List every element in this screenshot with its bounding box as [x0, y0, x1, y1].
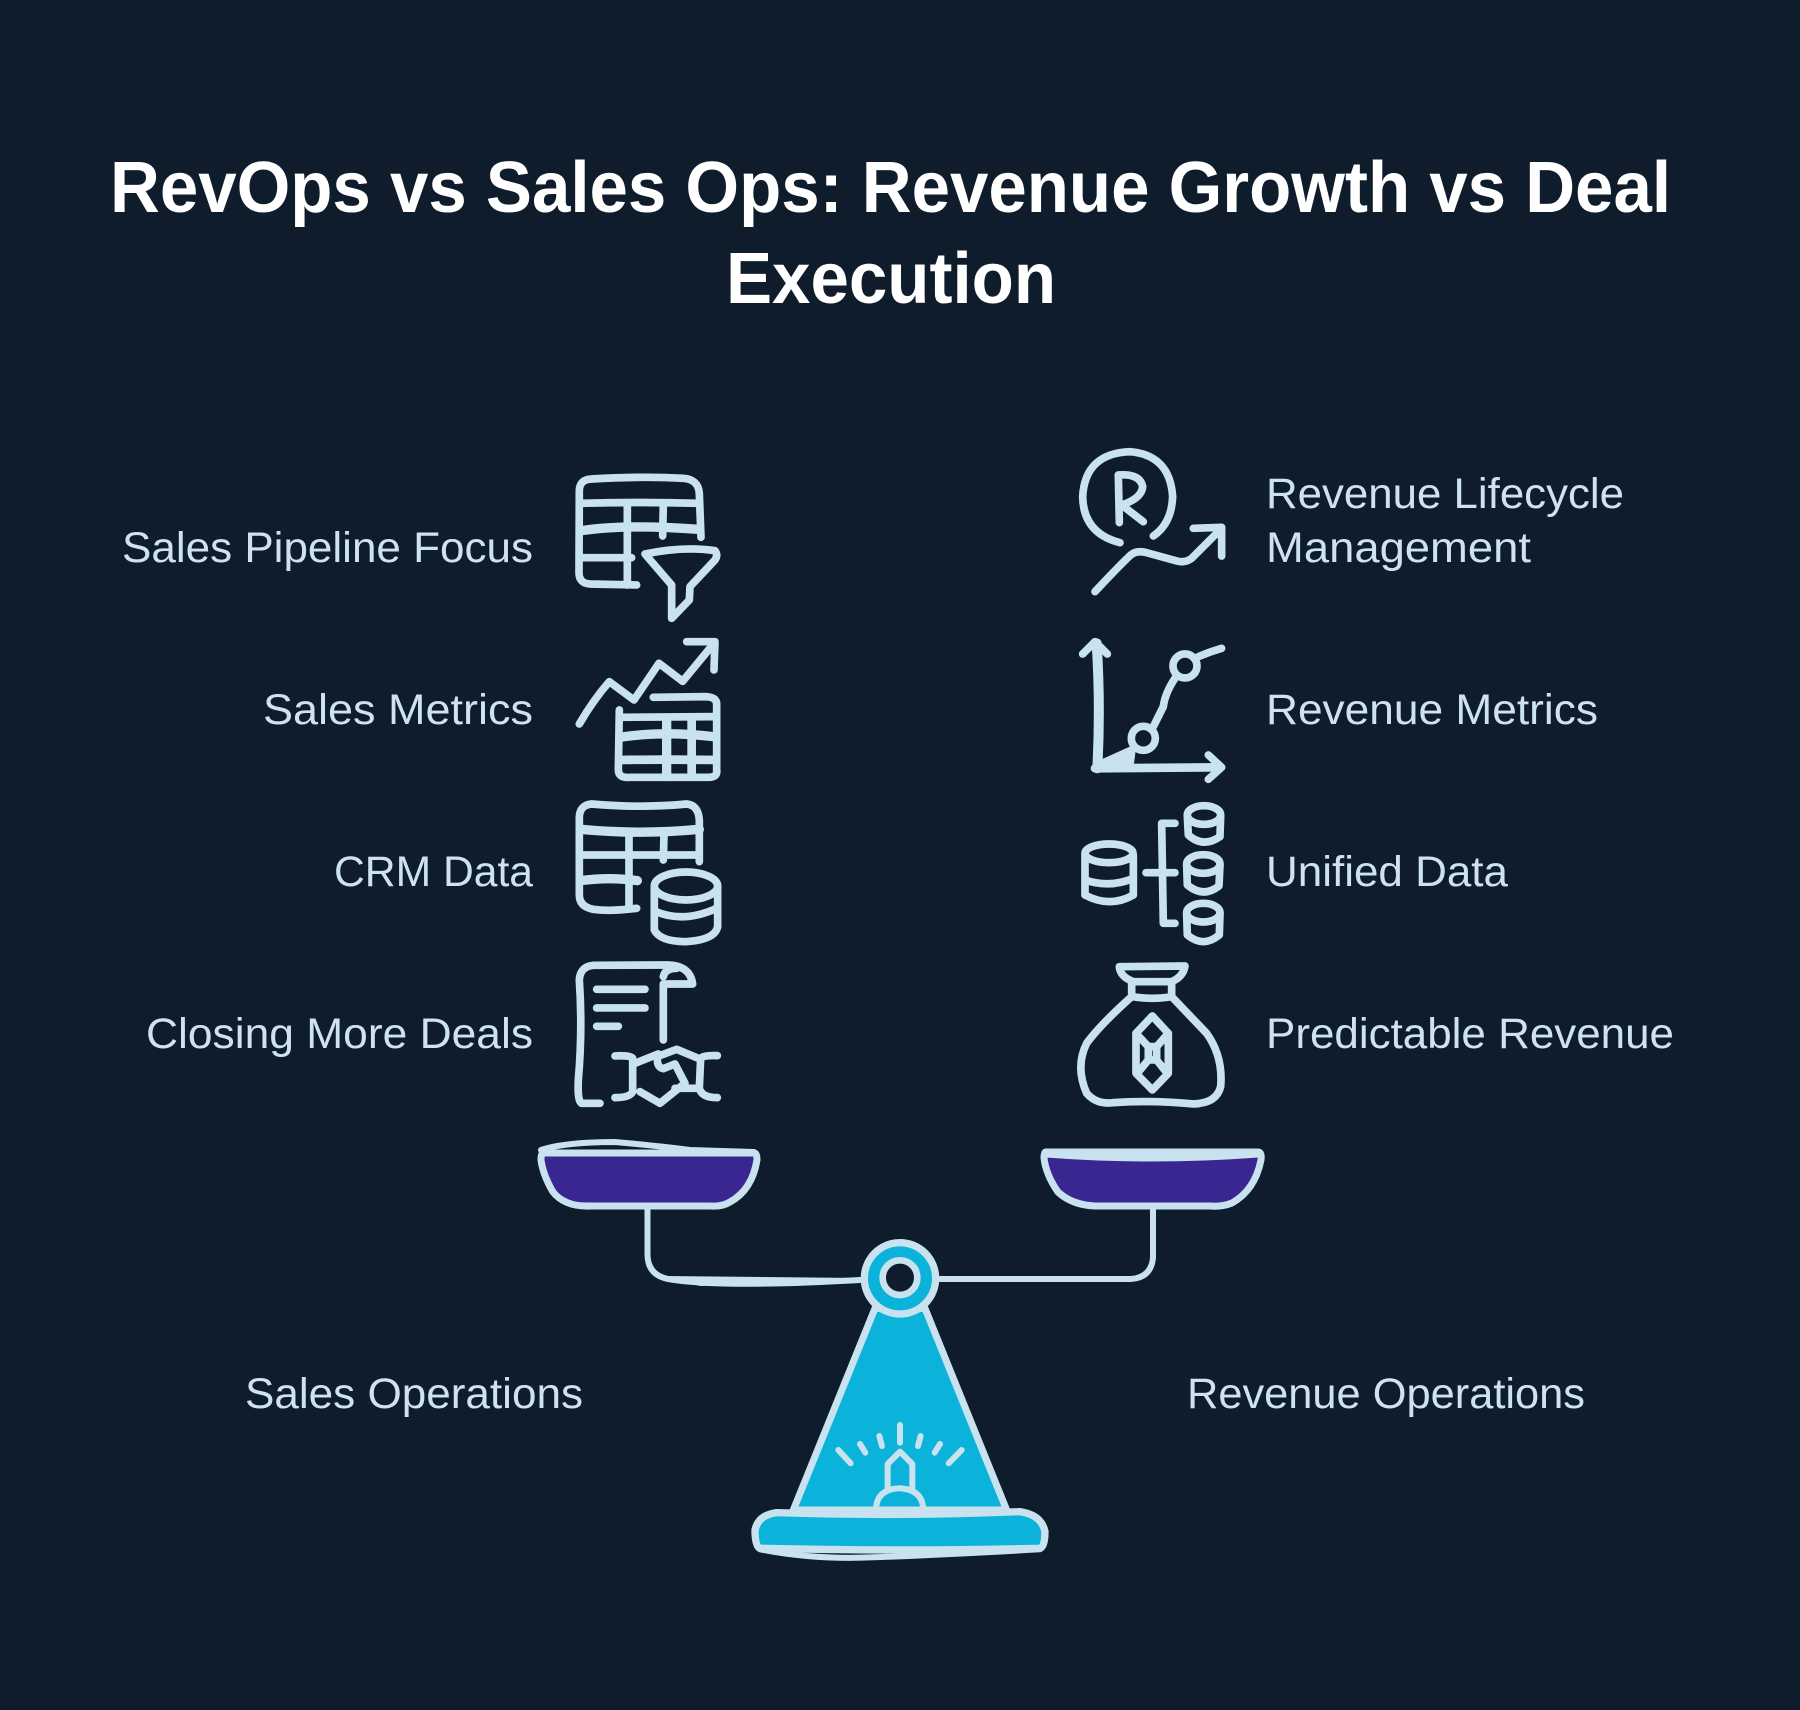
label: CRM Data: CRM Data — [334, 848, 533, 896]
beam — [648, 1208, 1153, 1286]
label: Revenue Lifecycle Management — [1266, 470, 1624, 572]
label: Closing More Deals: Closing More Deals — [146, 1010, 533, 1058]
scale — [541, 1142, 1261, 1558]
icon: growth arrow with table — [579, 642, 717, 777]
icon: light beacon — [838, 1425, 962, 1508]
icon: table with funnel — [579, 477, 717, 618]
label: Revenue Metrics: Revenue Metrics — [1266, 686, 1598, 734]
label: Sales Pipeline Focus: Sales Pipeline Focus — [122, 524, 533, 572]
right pan — [1044, 1152, 1261, 1206]
label: Revenue Operations: Revenue Operations — [1187, 1370, 1585, 1418]
title: RevOps vs Sales Ops: Revenue Growth vs Deal — [110, 148, 1671, 228]
label: Revenue Lifecycle Management: Management — [1266, 524, 1531, 572]
icon: contract with handshake — [578, 965, 717, 1103]
label: Sales Metrics: Sales Metrics — [263, 686, 533, 734]
icon: money bag with gem — [1081, 966, 1221, 1104]
label: Unified Data: Unified Data — [1266, 848, 1508, 896]
label: Revenue Lifecycle Management: Revenue Lifecycle — [1266, 470, 1624, 518]
label: Sales Operations: Sales Operations — [245, 1370, 583, 1418]
icon: table with database — [579, 804, 718, 942]
left pan — [541, 1142, 757, 1206]
title — [110, 148, 1671, 319]
icon: unified databases — [1085, 806, 1221, 942]
title: Execution — [726, 239, 1056, 319]
icon: line chart with axes — [1083, 642, 1222, 779]
icon: revenue circle with rising line — [1083, 452, 1222, 592]
label: Predictable Revenue: Predictable Revenue — [1266, 1010, 1674, 1058]
stand and pivot — [755, 1243, 1045, 1558]
